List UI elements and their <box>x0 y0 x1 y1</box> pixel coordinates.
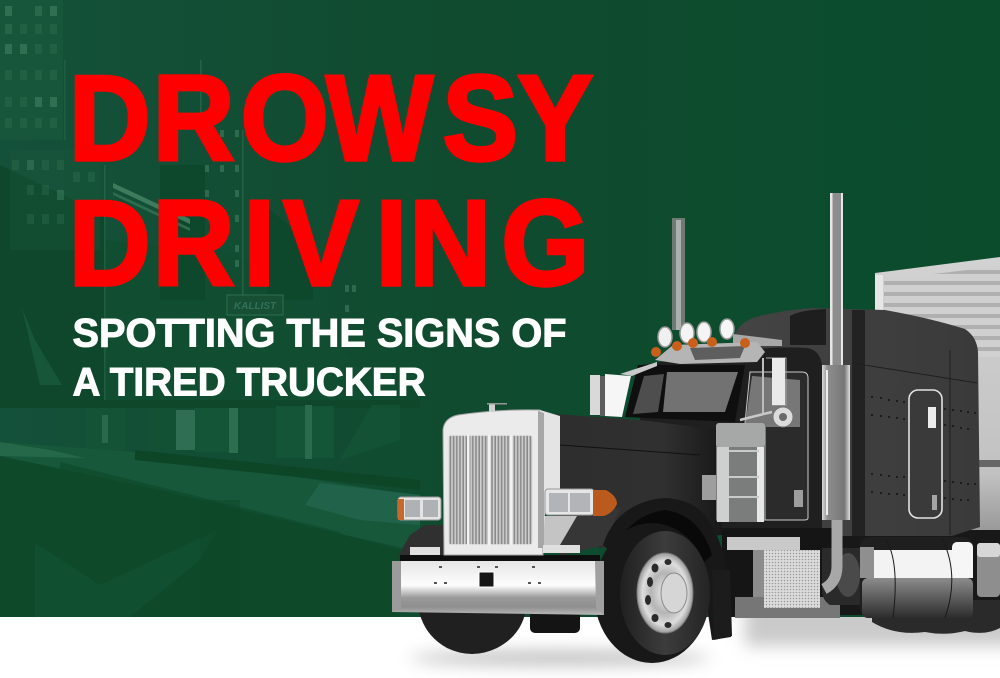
sleeper door <box>909 390 942 518</box>
truck illustration <box>392 193 1000 665</box>
front under-frame <box>398 525 443 556</box>
left exhaust stack <box>672 218 685 330</box>
left tire <box>417 595 527 654</box>
toolbox <box>753 550 820 608</box>
hood ornament <box>489 403 495 412</box>
dark chassis behind tank <box>822 530 1000 615</box>
chrome side strip <box>540 410 560 548</box>
right exhaust stack <box>822 193 850 589</box>
center block <box>530 608 580 633</box>
sleeper <box>733 308 980 536</box>
title: DROWSY DRIVING: DROWSY <box>69 49 593 186</box>
door <box>745 372 808 520</box>
tower with windows <box>0 0 100 250</box>
road <box>0 442 420 617</box>
mirror <box>740 358 793 427</box>
front wheel <box>594 523 710 663</box>
rear chrome box <box>977 543 1000 597</box>
bumper <box>392 561 604 615</box>
ground shadow <box>413 617 1000 674</box>
roof light bar <box>651 319 782 364</box>
lower body, wheel well and fender <box>560 498 832 640</box>
cab <box>590 347 822 532</box>
chassis chrome and step <box>727 537 840 618</box>
overhead gantry <box>113 183 190 224</box>
left headlight <box>398 497 441 520</box>
windshield <box>625 365 745 422</box>
right headlight <box>545 489 617 516</box>
door handle <box>794 490 803 507</box>
road sign: KALLIST <box>234 301 277 312</box>
dark left wedge <box>0 165 105 405</box>
fuel tank <box>822 537 973 618</box>
bumper brackets <box>410 547 440 555</box>
title: DROWSY DRIVING: DRIVING <box>69 174 590 311</box>
rear wheels <box>872 600 1000 634</box>
grille <box>443 403 560 555</box>
lower city shapes <box>22 308 62 385</box>
trailer <box>875 257 1000 545</box>
hood <box>555 414 722 548</box>
air cleaner <box>702 423 765 522</box>
subtitle: A TIRED TRUCKER <box>72 360 426 404</box>
chrome windshield posts <box>590 375 600 415</box>
subtitle <box>72 312 566 404</box>
subtitle: SPOTTING THE SIGNS OF <box>72 312 566 356</box>
road sign <box>227 295 283 315</box>
mid tower <box>64 60 356 405</box>
title: DROWSY DRIVING <box>69 49 593 311</box>
